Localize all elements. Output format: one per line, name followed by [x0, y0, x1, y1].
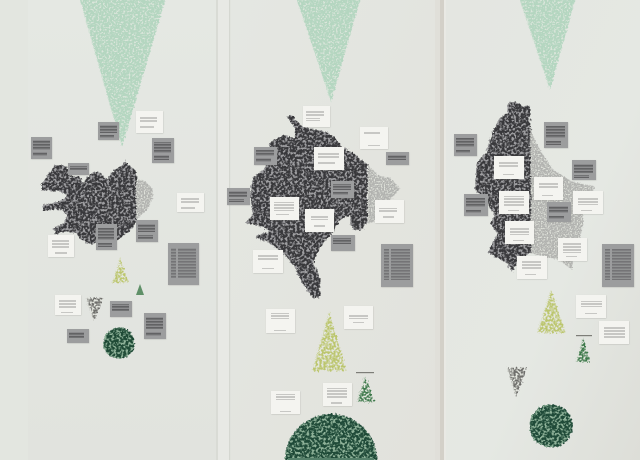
- panel: centre column, map: [227, 0, 413, 460]
- green circle: [530, 404, 572, 448]
- card: [323, 383, 352, 406]
- yellow-green triangle: [537, 290, 565, 333]
- card: [464, 194, 488, 216]
- card: [517, 256, 547, 279]
- card: [572, 160, 596, 180]
- card: [227, 188, 250, 205]
- map: dark region: [245, 115, 368, 298]
- card: [314, 147, 344, 170]
- green triangle with bar: [576, 335, 592, 362]
- card: [96, 224, 117, 250]
- card: [48, 235, 74, 257]
- card: [547, 202, 571, 222]
- card: [576, 295, 606, 318]
- card: [499, 191, 529, 214]
- card: [454, 134, 477, 156]
- card: [360, 127, 388, 149]
- card: [505, 221, 534, 244]
- card: [386, 152, 409, 165]
- card: [534, 177, 563, 200]
- card: [558, 238, 587, 261]
- card: [305, 209, 334, 232]
- card: [303, 106, 330, 127]
- card: [110, 301, 132, 317]
- panel: right column, map: [454, 0, 634, 448]
- large green circle: [285, 414, 377, 460]
- card: [68, 163, 89, 175]
- grey inverted triangle: [507, 368, 526, 397]
- map: light region: [530, 130, 595, 270]
- top inverted green triangle: [297, 0, 360, 102]
- legend card: [602, 244, 634, 287]
- card: [253, 250, 283, 273]
- card: [67, 329, 89, 343]
- card: [177, 193, 204, 212]
- card: [331, 181, 354, 198]
- card: [55, 295, 81, 315]
- card: [494, 156, 524, 179]
- map: light region: [136, 180, 153, 219]
- yellow triangle: [112, 258, 128, 283]
- card: [544, 122, 568, 148]
- card: [573, 191, 603, 214]
- card: [136, 220, 158, 242]
- card: [254, 147, 277, 165]
- map: light region: [368, 165, 400, 223]
- card: [266, 309, 295, 333]
- card: [271, 391, 300, 414]
- small green triangle: [136, 284, 144, 295]
- card: [136, 111, 163, 133]
- legend card: [168, 243, 199, 285]
- map: dark region: [475, 102, 531, 272]
- card: [270, 197, 299, 220]
- yellow-green triangle: [312, 312, 346, 371]
- green circle: [104, 328, 134, 358]
- panel: left column, Iceland: [31, 0, 204, 358]
- top inverted green triangle: [520, 0, 575, 90]
- top inverted green triangle: [80, 0, 165, 147]
- card: [331, 235, 355, 251]
- card: [344, 306, 373, 329]
- card: [31, 137, 52, 159]
- card: [599, 321, 629, 344]
- card: [152, 138, 174, 163]
- green triangle with bar: [356, 372, 374, 402]
- card: [98, 122, 119, 140]
- map: dark region: [41, 161, 137, 245]
- legend card: [381, 244, 413, 287]
- grey inverted triangle: [86, 298, 103, 321]
- card: [375, 200, 404, 223]
- card: [144, 313, 166, 339]
